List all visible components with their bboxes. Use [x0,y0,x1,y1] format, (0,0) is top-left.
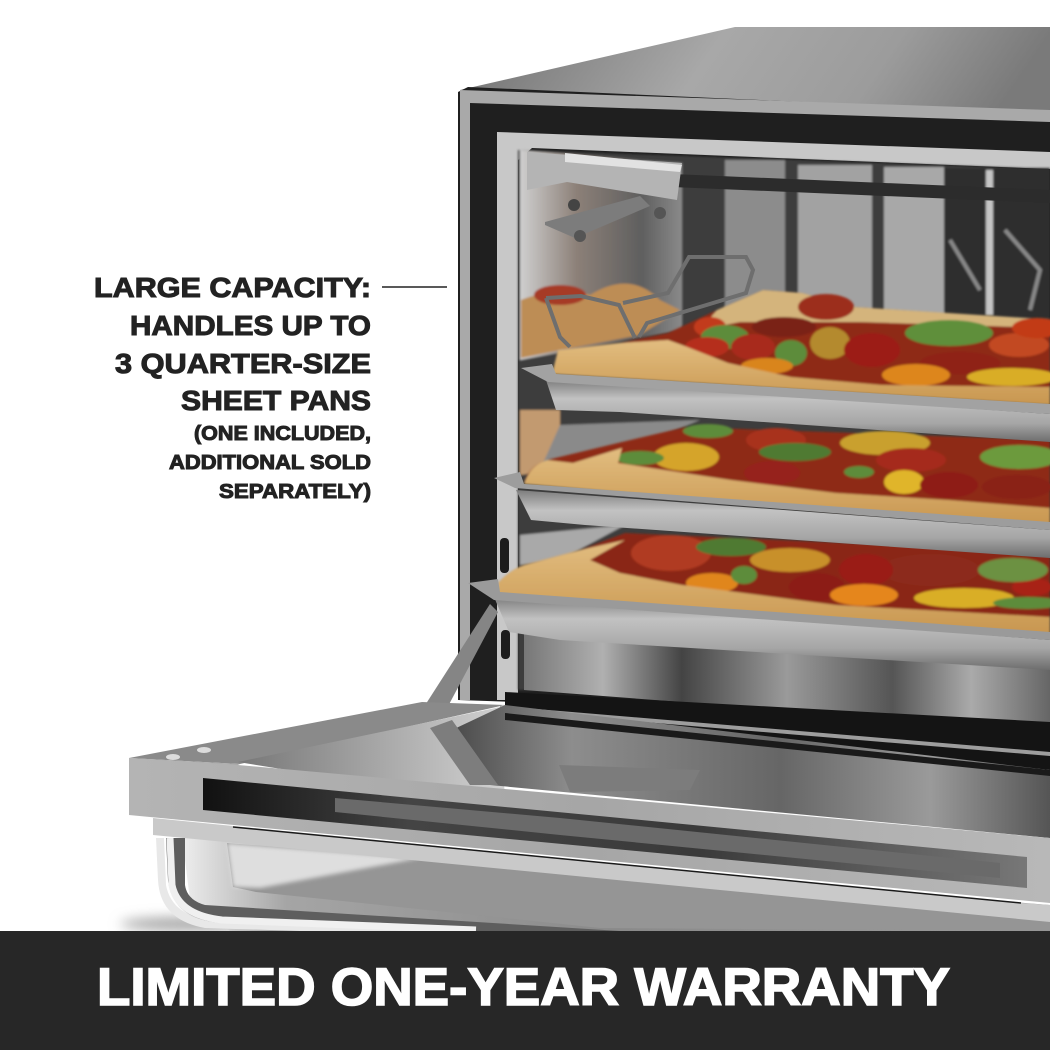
footer banner [0,931,1050,1050]
oven front frame [458,87,1050,720]
lower oven floor reflection [524,633,1050,730]
oven illustration [120,27,1050,931]
chrome side wall [520,150,682,360]
oven interior [518,150,1050,700]
door handle [156,836,1050,931]
bottom tray with pizza [468,533,1050,670]
warranty heading: LIMITED ONE-YEAR WARRANTY [97,958,950,1017]
door glass [238,707,505,800]
heating rod and bracket [527,152,1050,242]
callout text: ADDITIONAL SOLD [169,452,371,474]
door lower flange [153,818,1050,922]
oven top panel [460,27,1050,113]
door screws [166,747,211,760]
door slot window [203,778,1027,888]
back wall panels [725,160,785,320]
door hinge arm [422,604,498,712]
middle tray with pizza [494,424,1050,558]
door gasket [505,692,1050,770]
callout text: SHEET PANS [181,385,371,416]
callout text: SEPARATELY) [219,481,371,503]
callout text: HANDLES UP TO [130,310,371,341]
callout text: 3 QUARTER-SIZE [115,348,371,379]
callout leader line [382,286,447,288]
side slots [500,538,510,659]
door top frame [129,702,505,764]
open door [129,702,1050,922]
door front bar [129,758,1050,903]
wire rack handle [546,257,753,347]
callout: large capacity [94,272,447,503]
callout text: (ONE INCLUDED, [194,423,371,445]
reflected pizza [521,284,680,358]
handle bar shadow [120,917,260,931]
callout text [94,272,371,503]
callout text: LARGE CAPACITY: [94,272,371,303]
top tray with pizza [521,290,1050,442]
